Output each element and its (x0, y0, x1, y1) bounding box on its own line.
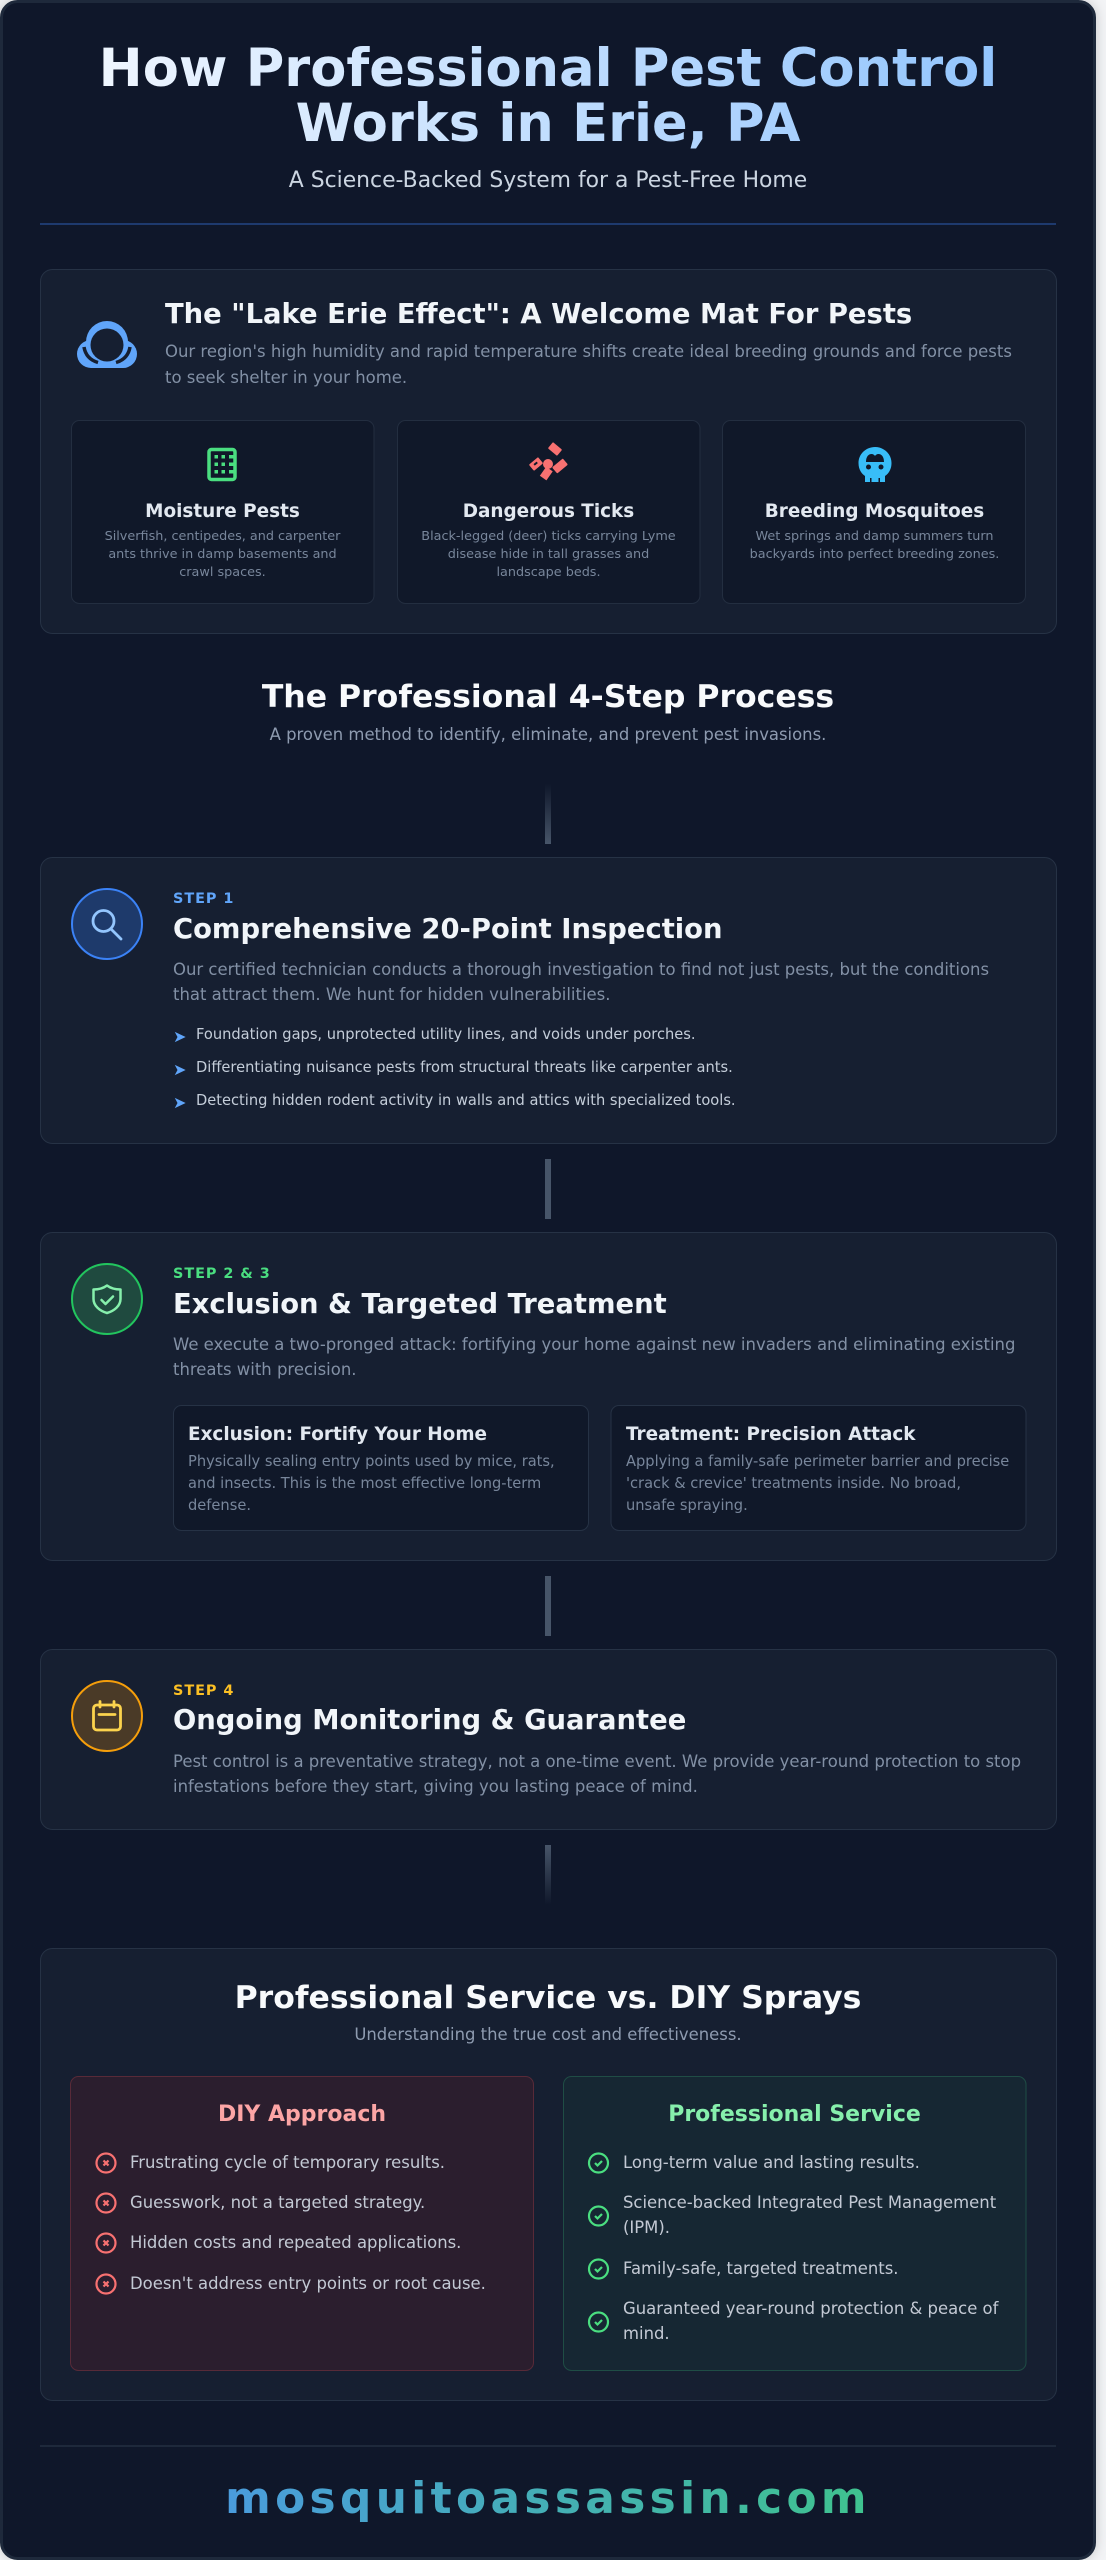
card: exclusion: Physically sealing entry points used by mice, rats, (188, 1453, 555, 1470)
text: Lake Erie intro: Our region's high humidity and rapid temperature shifts create ideal breeding grounds and force pests (165, 342, 1012, 361)
card: exclusion: and insects. This is the most effective long-term (188, 1475, 541, 1492)
connector arrow 4 (545, 1845, 551, 1905)
list: inspection points: Detecting hidden rodent activity in walls and attics with specialized tools. (196, 1092, 736, 1109)
panel: DIY approach (70, 2076, 534, 2370)
text: Moisture Pests description: crawl spaces. (179, 565, 266, 580)
list: professional benefits: Family-safe, targeted treatments. (623, 2259, 899, 2278)
card: treatment: 'crack & crevice' treatments inside. No broad, (626, 1475, 961, 1492)
title (99, 38, 997, 154)
panel: step 4 (40, 1650, 1056, 1830)
card: treatment: unsafe spraying. (626, 1497, 748, 1514)
heading: Lake Erie Effect: The "Lake Erie Effect": A Welcome Mat For Pests (165, 299, 912, 330)
panel: DIY approach: DIY Approach (218, 2102, 386, 2127)
panel: step 2 and 3 (40, 1232, 1056, 1560)
list: professional benefits: Long-term value and lasting results. (623, 2153, 920, 2172)
label: Breeding Mosquitoes: Breeding Mosquitoes (765, 501, 984, 522)
text: step 2 and 3 description: threats with precision. (173, 1360, 357, 1379)
text: Moisture Pests description: ants thrive in damp basements and (108, 547, 337, 562)
text: step 2 and 3 description: We execute a two-pronged attack: fortifying your home against new invaders and eliminating existing (173, 1335, 1015, 1354)
subtitle: A Science-Backed System for a Pest-Free Home (289, 168, 807, 193)
icon: calendar (72, 1681, 142, 1751)
text: step 4 description: Pest control is a preventative strategy, not a one-time event. We provide year-round protection to stop (173, 1752, 1021, 1771)
panel: comparison (40, 1948, 1056, 2400)
heading: process section (262, 679, 834, 744)
panel: step 1 (40, 858, 1056, 1144)
heading: step 4: Ongoing Monitoring & Guarantee (173, 1705, 686, 1736)
text: step 1 description (173, 960, 989, 1004)
label: Moisture Pests: Moisture Pests (145, 501, 300, 522)
icon: shield (72, 1264, 142, 1334)
list: professional benefits: mind. (623, 2324, 670, 2343)
card: Moisture Pests (72, 420, 374, 604)
text: Breeding Mosquitoes description: Wet springs and damp summers turn (755, 529, 994, 544)
text: Dangerous Ticks description (421, 529, 676, 580)
list: inspection points: Differentiating nuisance pests from structural threats like carpenter ants. (196, 1059, 733, 1076)
label: step 4: STEP 4 (173, 1683, 234, 1699)
icon: moisture building (209, 450, 235, 480)
icon: magnifier (72, 889, 142, 959)
label: step 2 and 3: STEP 2 & 3 (173, 1266, 271, 1282)
connector arrow 2 (545, 1159, 551, 1219)
icon: ticks (529, 442, 568, 480)
heading: step 1: Comprehensive 20-Point Inspection (173, 914, 722, 945)
list: DIY drawbacks: Hidden costs and repeated applications. (130, 2233, 461, 2252)
list: DIY drawbacks: Guesswork, not a targeted strategy. (130, 2193, 425, 2212)
label: Dangerous Ticks: Dangerous Ticks (463, 501, 634, 522)
text: Dangerous Ticks description: disease hide in tall grasses and (448, 547, 649, 562)
text: Breeding Mosquitoes description: backyards into perfect breeding zones. (750, 547, 999, 562)
list: professional benefits: Guaranteed year-round protection & peace of (623, 2299, 1000, 2318)
card: treatment: Treatment: Precision Attack (626, 1424, 916, 1445)
list: inspection points: ➤ (173, 1060, 186, 1079)
list: DIY drawbacks (96, 2153, 486, 2294)
heading: process section: A proven method to identify, eliminate, and prevent pest invasions. (270, 725, 826, 744)
panel: professional service (564, 2076, 1026, 2370)
heading: comparison: Professional Service vs. DIY Sprays (235, 1980, 861, 2016)
connector arrow 1 (545, 784, 551, 844)
list: inspection points: ➤ (173, 1093, 186, 1112)
icon: skull (858, 447, 892, 482)
list: DIY drawbacks: Doesn't address entry points or root cause. (130, 2274, 486, 2293)
card: Dangerous Ticks (398, 420, 700, 604)
list: professional benefits: Science-backed Integrated Pest Management (623, 2193, 997, 2212)
text: step 2 and 3 description (173, 1335, 1015, 1379)
text: Lake Erie intro (165, 342, 1012, 387)
card: exclusion: defense. (188, 1497, 251, 1514)
text: Dangerous Ticks description: Black-legged (deer) ticks carrying Lyme (421, 529, 676, 544)
label: step 1: STEP 1 (173, 891, 234, 907)
list: DIY drawbacks: Frustrating cycle of temporary results. (130, 2153, 445, 2172)
title: Works in Erie, PA (296, 93, 801, 154)
card: exclusion: Exclusion: Fortify Your Home (188, 1424, 487, 1445)
title: How Professional Pest Control (99, 38, 997, 99)
list: professional benefits: (IPM). (623, 2218, 670, 2237)
text: comparison subtitle: Understanding the true cost and effectiveness. (354, 2025, 742, 2044)
connector arrow 3 (545, 1576, 551, 1636)
text: Moisture Pests description (105, 529, 341, 580)
heading: step 2 and 3: Exclusion & Targeted Treatment (173, 1289, 667, 1320)
text: step 1 description: Our certified technician conducts a thorough investigation to find not just pests, but the conditions (173, 960, 989, 979)
header (99, 38, 997, 193)
heading: process section: The Professional 4-Step Process (262, 679, 834, 715)
card: treatment: Applying a family-safe perimeter barrier and precise (626, 1453, 1009, 1470)
panel: Lake Erie Effect (40, 270, 1056, 634)
text: step 4 description (173, 1752, 1021, 1796)
list: inspection points: ➤ (173, 1027, 186, 1046)
list: inspection points: Foundation gaps, unprotected utility lines, and voids under porches. (196, 1026, 696, 1043)
card: Breeding Mosquitoes (722, 420, 1026, 604)
text: Dangerous Ticks description: landscape beds. (496, 565, 601, 580)
text: Lake Erie intro: to seek shelter in your home. (165, 368, 407, 387)
icon: cloud (77, 321, 137, 368)
text: step 1 description: that attract them. We hunt for hidden vulnerabilities. (173, 985, 610, 1004)
text: step 4 description: infestations before they start, giving you lasting peace of mind. (173, 1777, 698, 1796)
card: treatment (611, 1406, 1026, 1530)
text: Moisture Pests description: Silverfish, centipedes, and carpenter (105, 529, 341, 544)
list: inspection points (173, 1026, 736, 1112)
footer: website: mosquitoassassin.com (225, 2473, 871, 2524)
card: exclusion (174, 1406, 588, 1530)
text: Breeding Mosquitoes description (750, 529, 999, 562)
list: professional benefits (589, 2153, 1000, 2343)
panel: professional service: Professional Service (668, 2102, 921, 2127)
